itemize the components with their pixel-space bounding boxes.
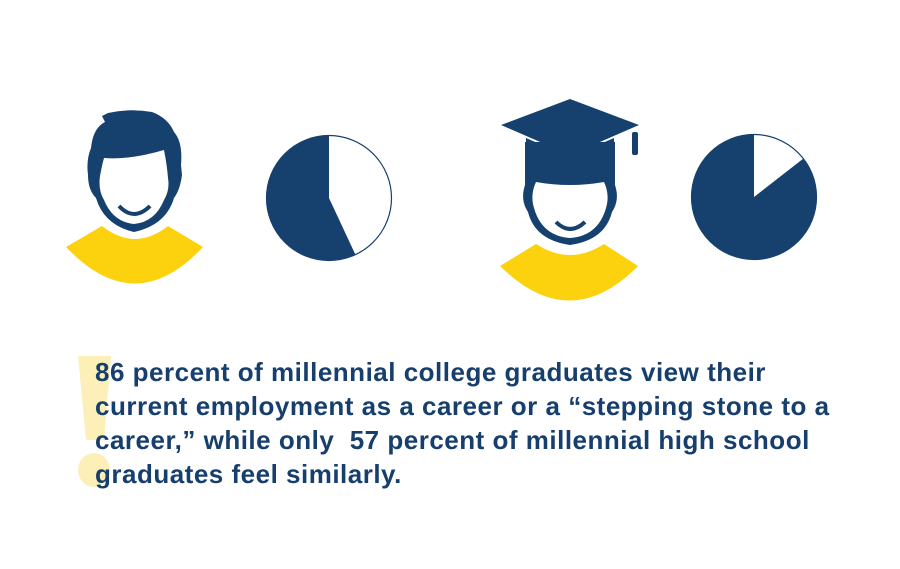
text block: statistic	[95, 357, 830, 489]
text block: statistic: graduates feel similarly.	[95, 459, 402, 489]
chart: pie 86 percent	[691, 134, 816, 260]
icon: exclamation mark	[78, 356, 111, 487]
chart: pie 57 percent	[266, 135, 392, 260]
icon: person	[66, 110, 203, 283]
text block: statistic: current employment as a career or a “stepping stone to a	[95, 391, 830, 421]
text block: statistic: career,” while only 57 percent of millennial high school	[95, 425, 810, 455]
icon: graduate	[500, 99, 639, 300]
text block: statistic: 86 percent of millennial college graduates view their	[95, 357, 766, 387]
